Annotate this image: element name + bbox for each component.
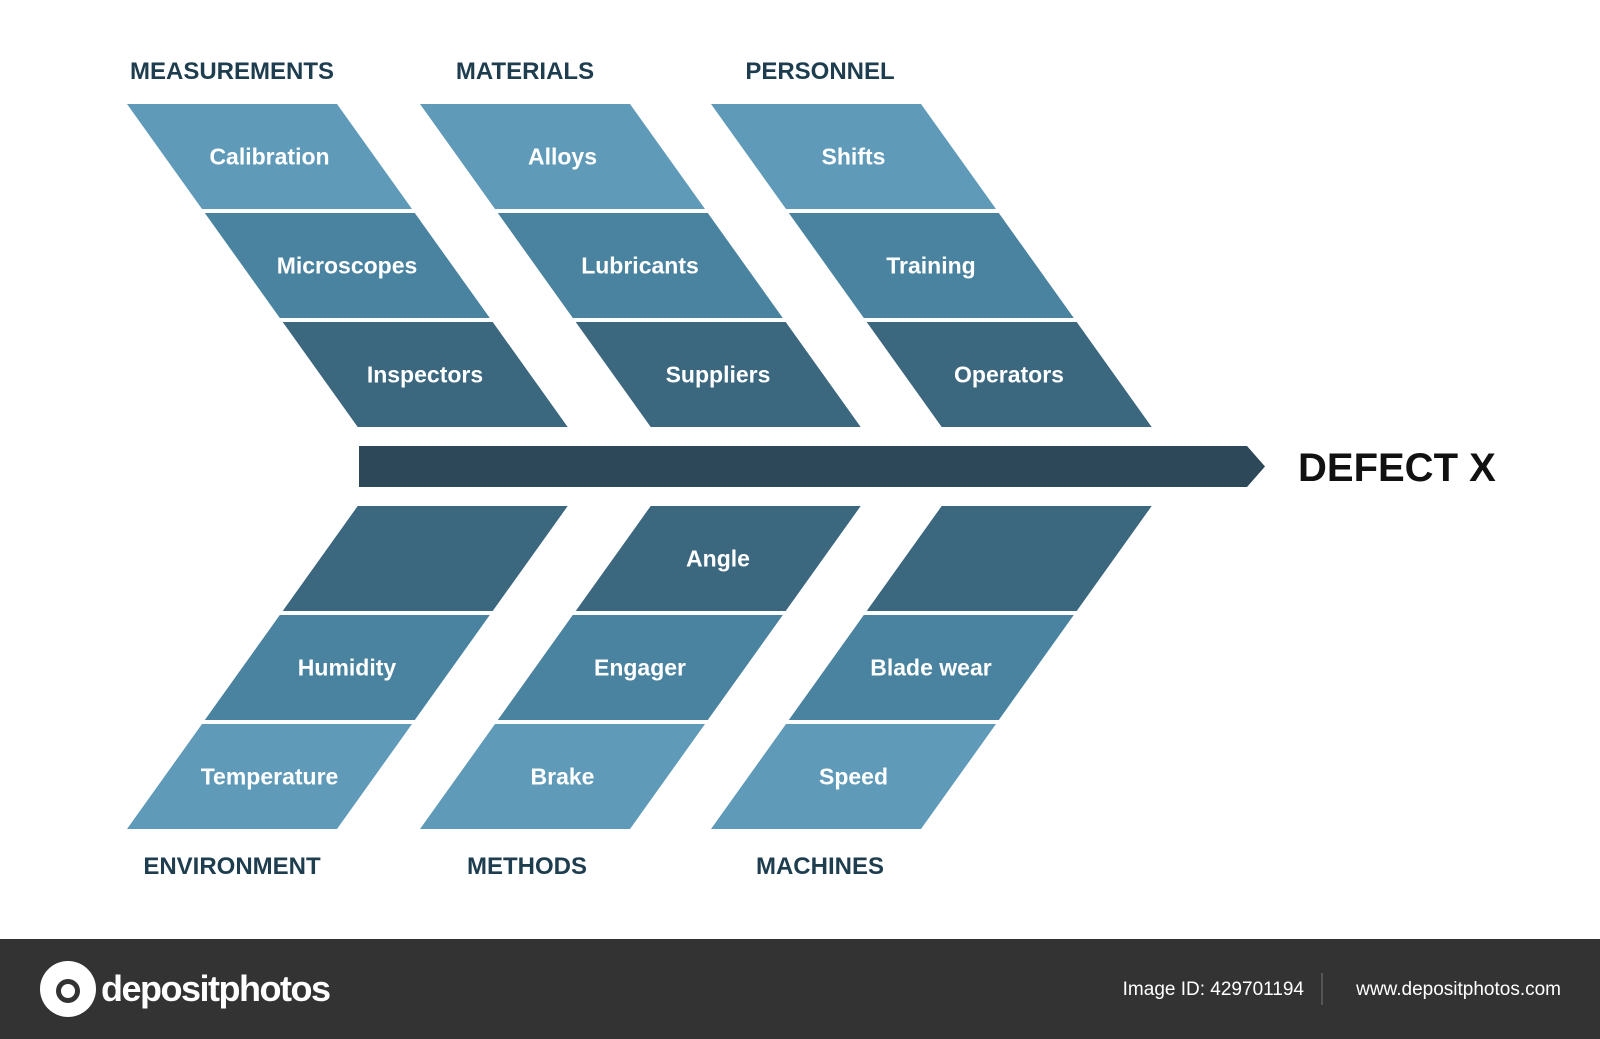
box: machines blank — [867, 506, 1152, 611]
heading: environment: ENVIRONMENT — [143, 853, 321, 880]
box: alloys — [420, 104, 705, 209]
box: blade wear: Blade wear — [870, 654, 992, 680]
box: temperature: Temperature — [201, 764, 338, 790]
heading: materials: MATERIALS — [456, 58, 594, 85]
branch: environment — [127, 506, 568, 880]
box: suppliers: Suppliers — [666, 362, 770, 388]
box: microscopes: Microscopes — [277, 252, 417, 278]
box: microscopes — [205, 213, 490, 318]
box: angle: Angle — [686, 546, 750, 572]
box: environment blank — [283, 506, 568, 611]
box: suppliers — [576, 322, 861, 427]
box: engager — [498, 615, 783, 720]
box: lubricants — [498, 213, 783, 318]
branch: measurements — [127, 58, 568, 427]
box: inspectors: Inspectors — [367, 362, 483, 388]
box: calibration — [127, 104, 412, 209]
box: speed — [711, 724, 996, 829]
box: calibration: Calibration — [209, 144, 330, 170]
website: www.depositphotos.com — [1355, 979, 1561, 1000]
footer bar — [0, 939, 1600, 1039]
spine arrow — [359, 446, 1265, 487]
box: speed: Speed — [819, 764, 888, 790]
logo text: depositphotos — [101, 968, 330, 1009]
box: temperature — [127, 724, 412, 829]
box: training: Training — [886, 252, 976, 278]
box: angle — [576, 506, 861, 611]
branch: machines — [711, 506, 1152, 880]
branch: materials — [420, 58, 861, 427]
box: humidity: Humidity — [298, 654, 396, 680]
box: shifts — [711, 104, 996, 209]
heading: personnel: PERSONNEL — [745, 58, 895, 85]
branch: personnel — [711, 58, 1152, 427]
box: humidity — [205, 615, 490, 720]
image id: Image ID: 429701194 — [1123, 979, 1304, 1000]
box: blade wear — [789, 615, 1074, 720]
box: brake — [420, 724, 705, 829]
branch: methods — [420, 506, 861, 880]
heading: measurements: MEASUREMENTS — [130, 58, 334, 85]
box: alloys: Alloys — [528, 144, 597, 170]
box: operators — [867, 322, 1152, 427]
box: brake: Brake — [531, 764, 594, 790]
box: engager: Engager — [594, 654, 686, 680]
box: lubricants: Lubricants — [581, 252, 699, 278]
box: shifts: Shifts — [822, 144, 885, 170]
box: operators: Operators — [954, 362, 1064, 388]
heading: machines: MACHINES — [756, 853, 884, 880]
box: inspectors — [283, 322, 568, 427]
heading: methods: METHODS — [467, 853, 587, 880]
icon: camera logo — [40, 961, 96, 1017]
box: training — [789, 213, 1074, 318]
effect label: DEFECT X — [1298, 446, 1496, 490]
